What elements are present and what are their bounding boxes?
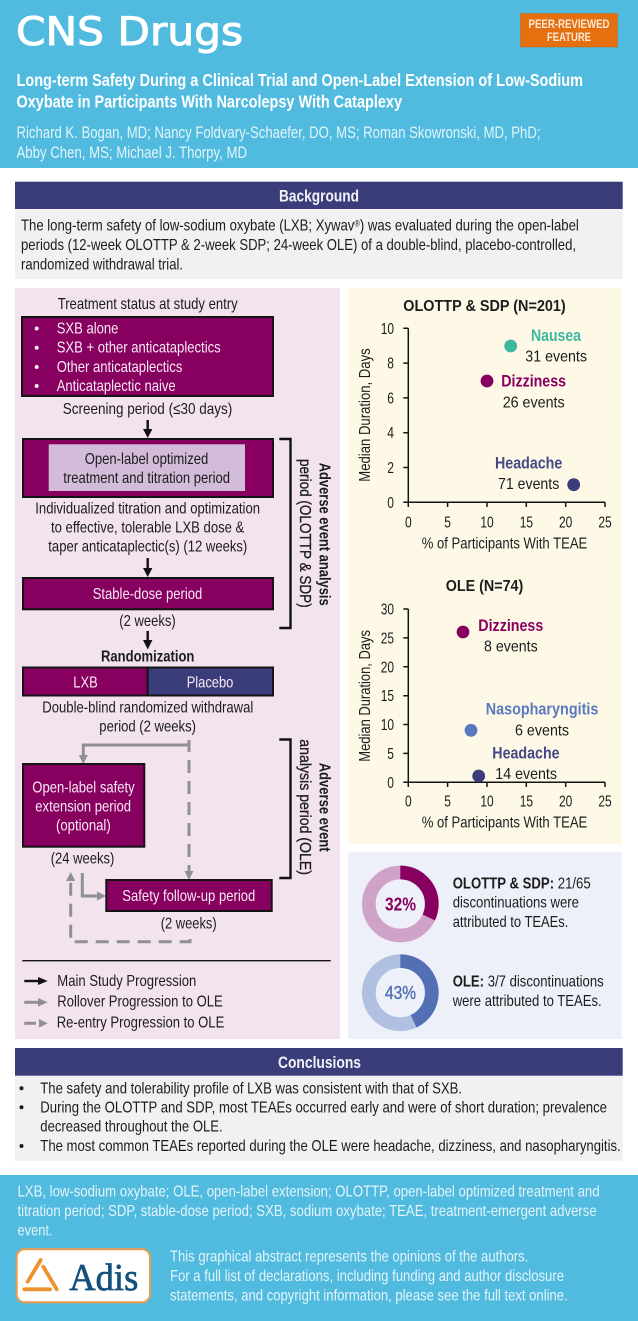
box: safety follow-up period: Safety follow-up period [122,888,255,905]
panel: discontinuations [348,852,622,1039]
chart title: OLE (N=74) [446,578,523,595]
background text: randomized withdrawal trial. [21,256,183,273]
point: headache [472,744,560,783]
scatter chart: OLOTTP and SDP: 5 [444,514,451,531]
scatter chart: OLE: 20 [559,794,572,811]
scatter chart: OLOTTP and SDP: Median Duration, Days [357,348,374,482]
text: randomization: Randomization [101,649,194,666]
text: titration description [35,500,260,556]
point: headache: Headache [492,744,560,762]
scatter chart: OLOTTP and SDP: 10 [480,514,494,531]
legend: Rollover Progression to OLE [57,994,223,1011]
text: OLOTTP and SDP discontinuations: OLOTTP & SDP: 21/65 [453,875,591,892]
box: LXB and placebo arms: LXB [73,675,98,692]
background text [21,218,579,273]
scatter chart: OLOTTP and SDP: 10 [381,321,394,338]
point: nasopharyngitis: 6 events [515,722,569,739]
box: safety follow-up period [106,880,272,911]
text: OLE discontinuations: OLE: 3/7 discontinuations [453,974,604,991]
box: treatment status list: Anticataplectic naive [57,378,176,395]
text: titration description: to effective, tolerable LXB dose & [51,520,245,537]
point: headache: 14 events [495,766,557,783]
box: LXB and placebo arms: Placebo [187,675,233,692]
point: headache: Headache [495,454,562,472]
panel: adverse event charts [348,288,622,844]
box: treatment status list: SXB + other anticataplectics [57,340,221,357]
scatter chart: OLOTTP and SDP: 6 [387,390,394,407]
scatter chart: OLE: 20 [381,659,394,676]
box: LXB and placebo arms [23,668,273,696]
scatter chart: OLOTTP and SDP: 8 [387,356,394,373]
box: stable-dose period: Stable-dose period [93,586,202,603]
scatter chart: OLE: 5 [444,794,451,811]
disclaimer: statements, and copyright information, please see the full text online. [170,1287,568,1304]
arrow: screening to open-label [143,420,152,438]
background text: ) was evaluated during the open-label [360,218,579,235]
scatter chart: OLE: 10 [381,717,394,734]
point: nausea: 31 events [525,349,587,366]
background text: The long-term safety of low-sodium oxybate (LXB; Xywav [21,218,422,235]
text: titration description: taper anticataplectic(s) (12 weeks) [48,539,247,556]
scatter chart: OLOTTP and SDP: 20 [559,514,572,531]
text: double-blind withdrawal period [42,699,253,736]
text: OLOTTP and SDP discontinuations [453,875,591,931]
bracket: OLOTTP and SDP period [279,439,290,628]
scatter chart: OLE: 30 [381,602,394,618]
text: screening period: Screening period (≤30 days) [63,401,232,418]
badge: peer-reviewed feature [520,14,618,47]
donut: 43 percent: 43% [385,983,416,1003]
header banner [0,0,638,168]
point: dizziness: 8 events [484,639,538,656]
conclusions list: decreased throughout the OLE. [40,1119,223,1136]
article title [16,70,583,112]
scatter chart: OLE: 10 [480,794,494,811]
box: open-label titration period [23,439,273,497]
arrow: rollover to safety follow-up [82,873,106,900]
scatter chart: OLOTTP and SDP: 2 [387,460,394,477]
scatter chart: OLOTTP and SDP: 0 [387,495,394,512]
conclusions list: The safety and tolerability profile of LXB was consistent with that of SXB. [40,1080,462,1097]
background text: ® [354,219,360,229]
heading: background: Background [279,188,359,206]
point: dizziness [481,372,566,411]
box: open-label titration period: treatment and titration period [63,470,230,487]
scatter chart: OLE: % of Participants With TEAE [422,815,587,832]
article title: Oxybate in Participants With Narcolepsy With Cataplexy [16,92,402,112]
point: nasopharyngitis: Nasopharyngitis [486,700,598,718]
point: dizziness: 26 events [503,394,565,411]
point: nausea [504,327,587,366]
heading: conclusions: Conclusions [278,1054,361,1072]
box: treatment status list [22,317,273,396]
panel: conclusions [15,1048,623,1161]
text: titration description: Individualized titration and optimization [35,500,260,517]
box: open-label safety extension: Open-label safety [32,779,135,796]
arrow: dashed to safety follow-up [184,760,194,880]
arrow: titration to stable-dose [143,558,152,577]
legend: Re-entry Progression to OLE [57,1015,224,1032]
arrow: rollover to open-label extension [79,740,189,764]
point: dizziness: Dizziness [501,372,566,390]
scatter chart: OLE: 0 [387,775,394,792]
text: two weeks: (2 weeks) [119,613,176,630]
bracket: OLE period [279,740,290,878]
text: treatment status: Treatment status at study entry [58,296,238,313]
conclusions list [20,1080,621,1155]
scatter chart: OLE: 5 [387,746,394,763]
text: OLE discontinuations: were attributed to TEAEs. [452,993,602,1010]
text: double-blind withdrawal period: Double-blind randomized withdrawal [42,699,253,716]
scatter chart: OLOTTP and SDP: % of Participants With TEAE [422,535,587,552]
text: OLOTTP and SDP discontinuations: attributed to TEAEs. [453,914,568,931]
legend [24,973,224,1032]
point: nasopharyngitis [465,700,598,739]
box: open-label safety extension: extension period [35,799,131,816]
disclaimer: This graphical abstract represents the opinions of the authors. [170,1249,528,1266]
donut: 32 percent: 32% [385,895,416,915]
box: open-label safety extension: (optional) [56,818,111,835]
point: nausea: Nausea [531,327,582,345]
abbreviations: event. [18,1223,52,1240]
scatter chart: OLE: 0 [405,794,412,811]
authors [16,124,540,162]
label: OLE analysis period [296,739,332,875]
text: OLOTTP and SDP discontinuations: discontinuations were [453,895,579,912]
scatter chart: OLOTTP and SDP: 25 [598,514,612,531]
box: treatment status list: Other anticataplectics [57,359,182,376]
scatter chart: OLOTTP and SDP [357,298,612,552]
point: headache: 71 events [498,476,559,493]
scatter chart: OLE: 25 [381,630,394,647]
scatter chart: OLE: 25 [598,794,612,811]
text: double-blind withdrawal period: period (2 weeks) [99,719,196,736]
panel: study design flow [15,288,340,1039]
point: headache [495,454,580,493]
point: dizziness [457,617,543,656]
text: two weeks follow-up: (2 weeks) [161,915,217,932]
box: treatment status list: SXB alone [57,321,119,338]
scatter chart: OLE: Median Duration, Days [357,630,374,762]
label: OLOTTP and SDP analysis period [296,459,332,608]
box: open-label titration period: Open-label optimized [85,451,208,468]
authors: Abby Chen, MS; Michael J. Thorpy, MD [16,144,247,162]
scatter chart: OLOTTP and SDP: 15 [520,514,533,531]
chart title: OLOTTP & SDP (N=201) [403,298,566,315]
arrow: stable-dose to randomization [143,631,152,650]
disclaimer [170,1249,568,1304]
logo: Adis [17,1249,150,1302]
text: 24 weeks: (24 weeks) [51,850,114,867]
badge: peer-reviewed feature: FEATURE [547,32,591,44]
point: dizziness: Dizziness [478,617,543,635]
scatter chart: OLOTTP and SDP: 4 [387,425,394,442]
scatter chart: OLOTTP and SDP: 0 [405,514,412,531]
badge: peer-reviewed feature: PEER-REVIEWED [528,19,610,31]
label: OLOTTP and SDP analysis period: Adverse event analysis [316,463,332,606]
scatter chart: OLE: 15 [520,794,533,811]
logo: Adis: Adis [69,1257,138,1299]
donut: 43 percent [369,961,432,1024]
label: OLOTTP and SDP analysis period: period (OLOTTP & SDP) [296,459,313,608]
box: open-label safety extension [23,764,144,847]
abbreviations [18,1184,600,1240]
legend: Main Study Progression [57,973,196,990]
panel: background [15,182,623,279]
label: OLE analysis period: analysis period (OLE) [296,739,313,875]
scatter chart: OLE: 15 [381,688,394,705]
text: OLE discontinuations [452,974,604,1010]
scatter chart: OLE [357,578,612,832]
arrow: dashed re-entry to extension [66,872,190,942]
box: stable-dose period [23,578,273,609]
donut: 32 percent [369,872,432,936]
footer [0,1175,638,1321]
disclaimer: For a full list of declarations, including funding and author disclosure [170,1268,564,1285]
label: OLE analysis period: Adverse event [316,763,332,852]
journal title: CNS Drugs [16,10,243,55]
